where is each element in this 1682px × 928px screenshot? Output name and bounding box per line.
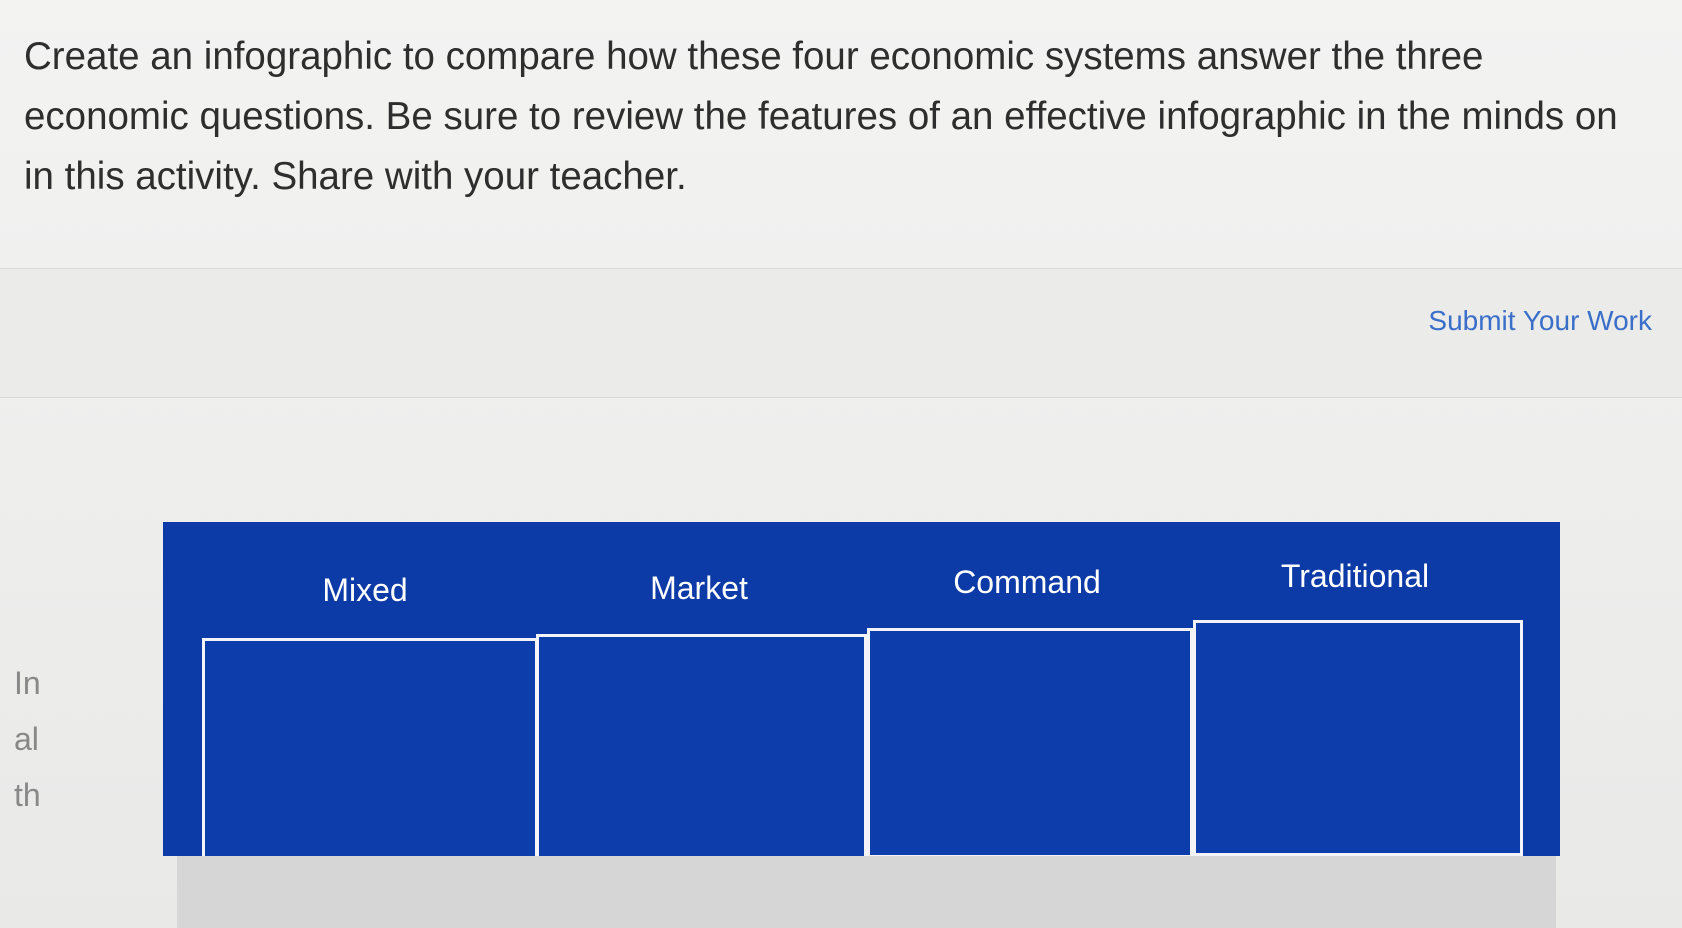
left truncated text: al [14, 721, 39, 757]
prompt text: in this activity. Share with your teacher. [24, 155, 687, 198]
submit band [0, 268, 1682, 398]
header: Market: Market [650, 570, 748, 606]
prompt text: Create an infographic to compare how these four economic systems answer the three [24, 35, 1483, 78]
prompt text: economic questions. Be sure to review the features of an effective infographic in the minds on [24, 95, 1618, 138]
left truncated text: In [14, 665, 41, 701]
box: Market [536, 634, 867, 864]
box: Command [867, 628, 1193, 858]
submit link: Submit Your Work [1428, 305, 1652, 336]
panel: economic systems table [163, 522, 1560, 856]
left truncated text [14, 665, 41, 813]
left truncated text: th [14, 777, 41, 813]
prompt text [24, 35, 1618, 198]
header: Traditional: Traditional [1281, 558, 1429, 594]
header: Command: Command [953, 564, 1101, 600]
box: Mixed [202, 638, 538, 868]
box: Traditional [1193, 620, 1523, 856]
header: Mixed: Mixed [322, 572, 408, 608]
gray footer box [177, 856, 1556, 928]
